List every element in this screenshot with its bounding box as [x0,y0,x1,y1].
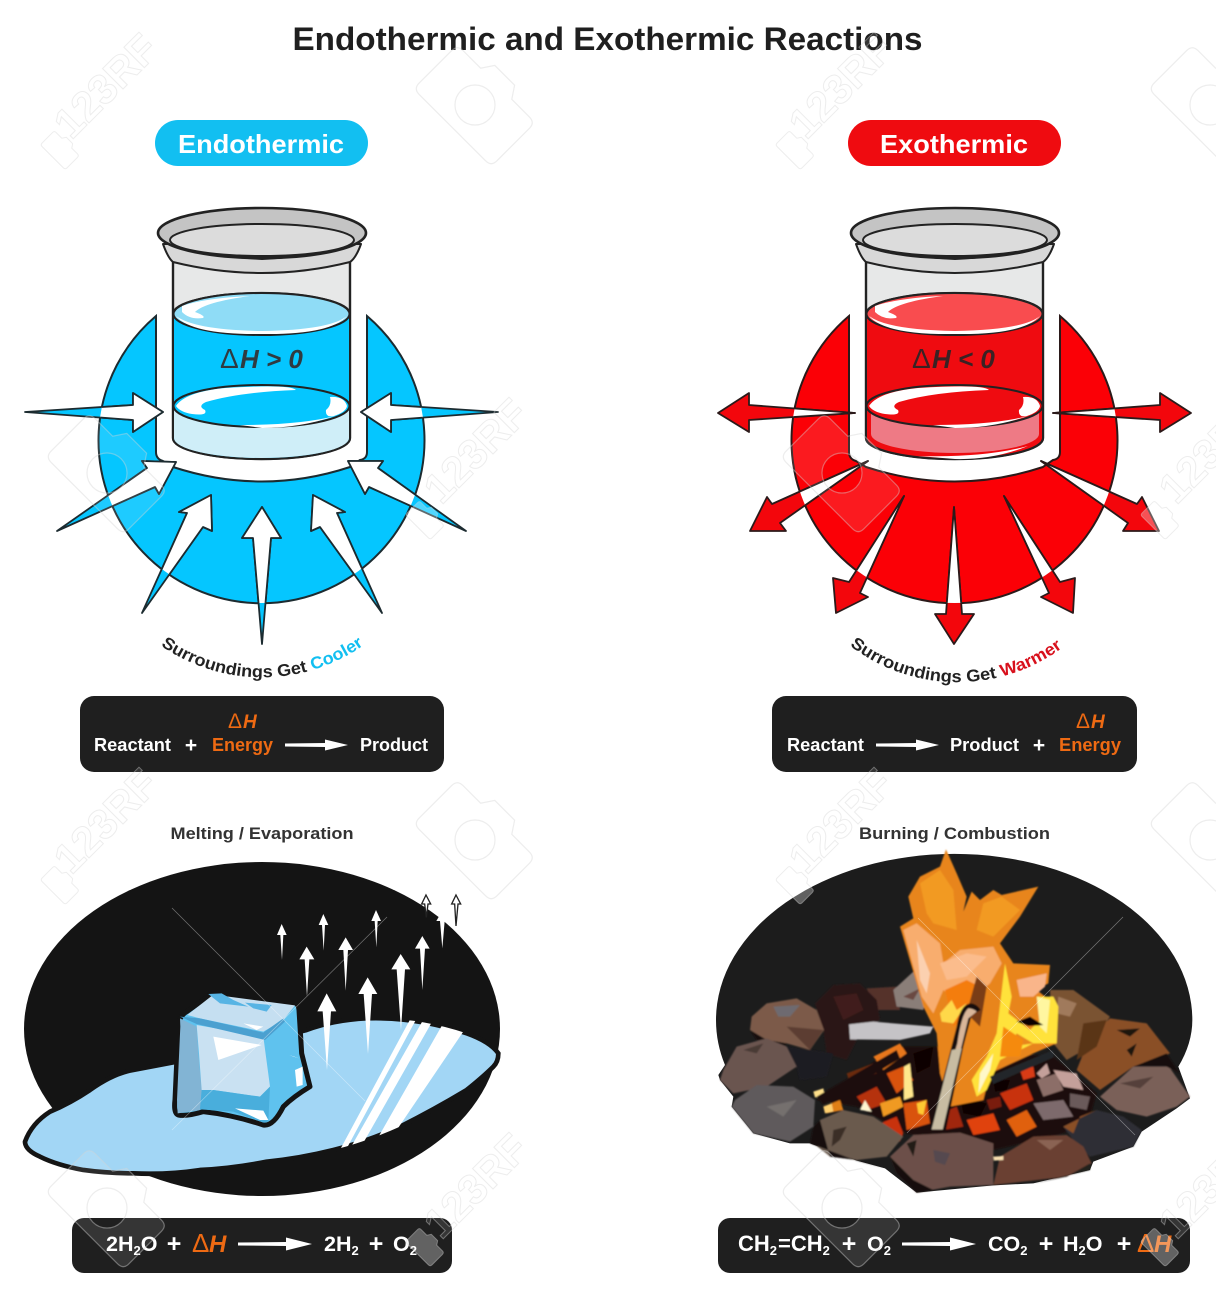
reaction equation box: + [185,734,197,757]
reaction equation box: H [243,712,258,733]
beaker with blue liquid [158,208,366,459]
delta H less than zero: Δ [912,343,931,374]
watermark overlay: 123RF [45,25,167,147]
watermark overlay: 123RF [415,1125,537,1247]
formula box: combustion: O [867,1232,884,1256]
melting ice illustration [24,862,500,1196]
formula box: water [72,1218,452,1273]
embers bed [813,1043,1097,1150]
delta H greater than zero: Δ [220,343,239,374]
formula box: water: O [141,1232,157,1256]
panel: endothermic [22,120,501,1273]
reaction equation box [772,696,1137,772]
sub heading: burning: Burning / Combustion [859,824,1050,843]
formula box: water: 2 [133,1243,141,1258]
watermark overlay: 123RF [415,390,537,512]
formula box: water: + [167,1230,181,1258]
curved caption: surroundings get warmer: Surroundings Get Warmer [852,638,1060,686]
formula box: combustion: 2 [823,1243,830,1258]
formula box: combustion: O [1086,1232,1102,1256]
delta H less than zero: H < 0 [932,344,995,374]
puddle reflection stripes [339,1018,467,1152]
formula box: combustion: H [1154,1231,1172,1258]
formula box: water: O [393,1232,410,1256]
sub heading: melting: Melting / Evaporation [170,824,354,843]
formula box: combustion: =CH [778,1231,823,1256]
formula box: combustion: + [1117,1230,1131,1258]
reaction equation box: + [1033,734,1045,757]
heading pill: Exothermic [848,120,1061,166]
formula box: combustion: 2 [1020,1243,1027,1258]
formula box: combustion: 2 [884,1243,891,1258]
formula box: water: 2 [351,1243,359,1258]
flames [900,849,1058,1107]
reaction equation box [80,696,444,772]
arrows pointing outward [718,393,1191,644]
curved caption: surroundings get cooler: Surroundings Get Cooler [162,638,361,681]
reaction equation box: Energy [212,735,273,755]
reaction equation box: Reactant [787,735,864,755]
reaction equation box: Product [360,735,428,755]
steam arrows [277,895,461,1070]
blue surroundings disc with channel [99,316,425,603]
formula box: combustion: CH [738,1231,770,1256]
watermark overlay: 123RF [45,760,167,882]
campfire illustration [716,849,1192,1193]
dark backdrop with rock silhouette base [716,854,1192,1193]
formula box: water: Δ [192,1228,209,1258]
watermark overlay: 123RF [780,25,902,147]
reaction equation box: Product [950,735,1019,755]
panel: exothermic [716,120,1192,1273]
formula box: combustion: 2 [1079,1243,1086,1258]
formula box: combustion: CO [988,1232,1020,1256]
reaction equation box: Reactant [94,735,171,755]
heading pill: Endothermic: Endothermic [178,129,344,159]
rocks [720,972,1190,1142]
red surroundings disc with channel [792,316,1118,603]
reaction equation box: Energy [1059,735,1121,755]
reaction equation box: Δ [228,710,242,733]
formula box: combustion [718,1218,1190,1273]
watermark overlay: 123RF [780,760,902,882]
title: Endothermic and Exothermic Reactions [292,21,922,57]
puddle [25,1018,498,1174]
logs and sticks [849,1022,933,1040]
delta H greater than zero: H > 0 [240,344,303,374]
reaction equation box: Δ [1076,710,1090,733]
formula box: water: 2 [410,1243,417,1258]
arrows pointing inward [25,393,498,644]
formula box: combustion: + [1039,1230,1053,1258]
heading pill: Endothermic [155,120,368,166]
formula box: combustion: 2 [770,1243,777,1258]
formula box: combustion: + [842,1230,856,1258]
formula box: water: 2H [324,1232,351,1256]
formula box: water: 2H [106,1232,133,1256]
ice cube [175,993,310,1125]
formula box: combustion: H [1063,1232,1079,1256]
light stick [930,1003,981,1130]
front rocks [810,1110,1142,1193]
formula box: water: H [209,1231,227,1258]
heading pill: Exothermic: Exothermic [880,129,1028,159]
beaker with red liquid [851,208,1059,459]
formula box: combustion: Δ [1137,1228,1154,1258]
reaction equation box: H [1091,712,1106,733]
formula box: water: + [369,1230,383,1258]
